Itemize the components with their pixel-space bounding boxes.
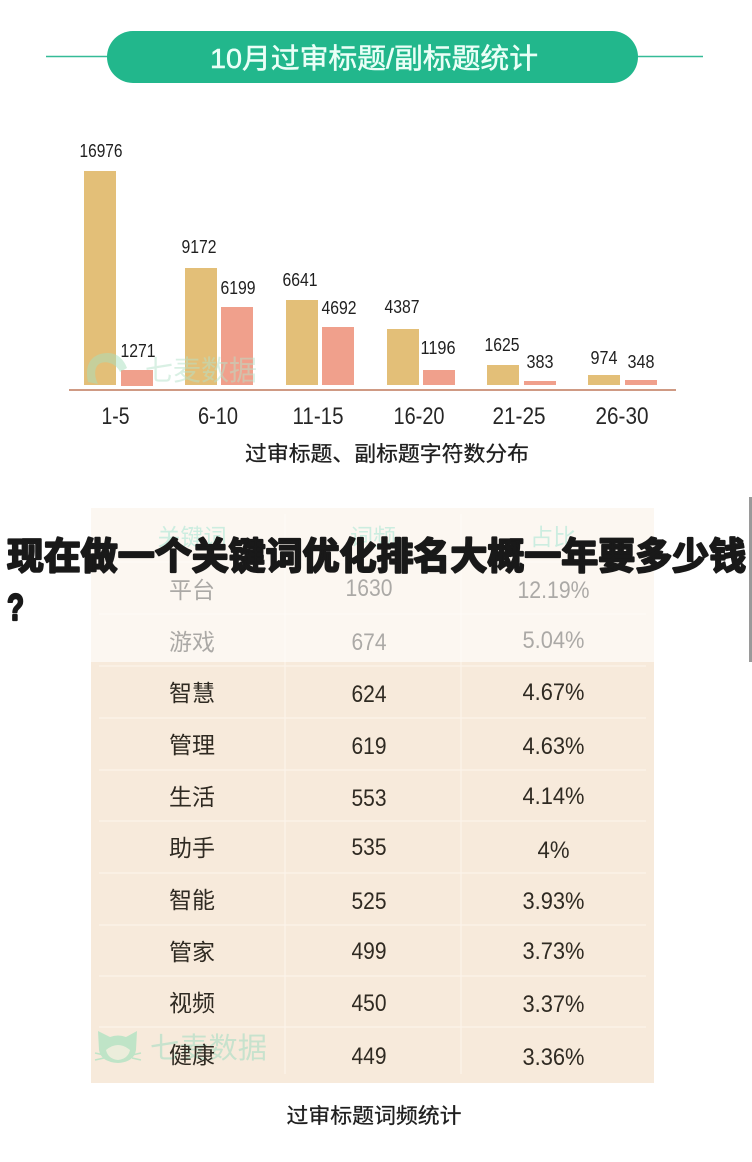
x axis labels: 26-30 [596,403,648,430]
table row: 助手 [169,834,570,864]
watermark: 七麦数据: 七麦数据 [145,355,257,386]
table row: 游戏: 5.04% [522,627,584,654]
value labels: 1625 [484,335,520,355]
table row: 管家 [169,938,584,965]
table row: 平台: 1630 [346,575,392,602]
x axis labels [102,403,648,430]
table row: 平台: 平台 [169,577,215,603]
chart caption: 过审标题、副标题字符数分布 [245,443,529,466]
value labels: 1196 [420,338,456,358]
table row: 管家: 管家 [169,939,215,965]
table row: 生活 [169,783,584,812]
x axis labels: 6-10 [198,403,238,430]
value labels: 4692 [322,298,356,318]
table row: 管家: 3.73% [522,938,584,965]
watermark: cat and 七麦数据: 七麦数据 [150,1032,267,1065]
value labels: 6199 [220,278,256,298]
right edge bar [749,497,752,662]
value labels: 383 [526,352,554,372]
table row: 管理: 619 [352,733,386,760]
table caption: 过审标题词频统计 [286,1105,462,1128]
x axis labels: 16-20 [394,403,444,430]
value labels: 16976 [80,141,122,161]
value labels [80,141,654,372]
watermark: cat and 七麦数据 [95,1031,267,1065]
value labels: 974 [590,348,618,368]
table row: 游戏: 674 [352,629,386,656]
table header row: 词频 [350,524,396,550]
table row: 智慧: 4.67% [522,679,584,706]
value labels: 348 [628,352,654,372]
value labels: 1271 [120,341,156,361]
table row: 生活: 553 [352,785,386,812]
table row: 助手: 助手 [169,835,215,861]
table row: 游戏: 游戏 [169,629,215,655]
table row: 视频: 3.37% [522,991,584,1018]
table row: 智慧: 智慧 [169,680,215,706]
x axis line [69,389,676,391]
table row: 智能: 3.93% [522,888,584,915]
table row: 助手: 535 [352,834,386,861]
watermark: 七麦数据 [87,353,257,386]
table row: 视频 [169,990,584,1018]
table row: 生活: 生活 [169,784,215,810]
table row: 健康: 健康 [169,1042,215,1068]
table header row: 占比 [530,524,576,550]
translucent overlay band [0,497,752,662]
overlay headline [7,536,746,628]
table row: 视频: 450 [352,990,386,1017]
bar chart: title and subtitle length distribution [69,141,676,466]
table row: 智慧: 624 [352,681,386,708]
table row: 管家: 499 [352,938,386,965]
table row: 生活: 4.14% [522,783,584,810]
table header row: 关键词 [158,524,226,550]
table row: 平台: 12.19% [518,577,590,604]
bars: subtitle counts [121,307,657,386]
x axis labels: 21-25 [492,403,546,430]
table row: 视频: 视频 [169,990,215,1016]
value labels: 6641 [282,270,318,290]
table header row [158,524,576,550]
x axis labels: 1-5 [102,403,130,430]
overlay headline: ? [7,587,24,628]
table row: 健康: 3.36% [522,1044,584,1071]
table grid [99,514,646,1074]
header banner [46,31,703,83]
value labels: 4387 [384,297,420,317]
value labels: 9172 [182,237,216,257]
overlay headline: 现在做一个关键词优化排名大概一年要多少钱 [7,536,746,577]
x axis labels: 11-15 [292,403,344,430]
table row: 管理: 管理 [169,732,215,758]
header banner: 10月过审标题/副标题统计 [210,43,538,74]
table row: 智能: 智能 [169,887,215,913]
table row: 管理 [169,732,584,760]
table row: 健康: 449 [352,1043,386,1070]
table row: 游戏 [169,627,584,656]
table row: 智能: 525 [352,888,386,915]
table row: 管理: 4.63% [522,733,584,760]
table: keyword frequency [91,508,654,1083]
table row: 智慧 [169,679,584,708]
table row: 智能 [169,887,584,915]
table row: 助手: 4% [538,837,570,864]
table row: 平台 [169,575,590,604]
bars: title counts [84,171,620,385]
table row: 健康 [169,1042,584,1071]
